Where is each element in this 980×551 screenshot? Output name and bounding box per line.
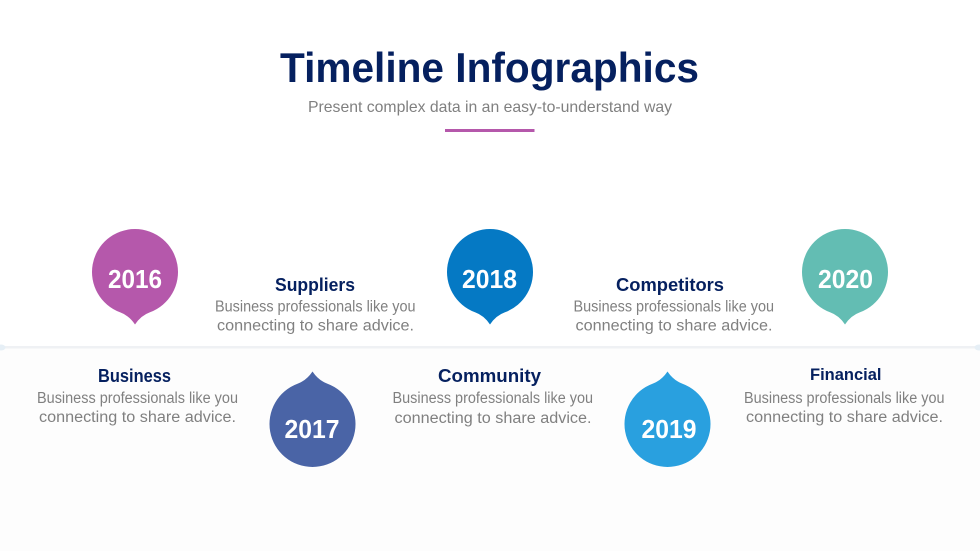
- year 2020: 2020: [818, 264, 873, 294]
- heading: Business: Business: [98, 365, 171, 386]
- text block: Financial: [744, 366, 944, 426]
- description: Community: Business professionals like you: [392, 390, 593, 407]
- pin 2016: [92, 229, 178, 324]
- heading: Competitors: Competitors: [616, 274, 724, 295]
- text block: Business: [37, 365, 238, 426]
- year 2019: 2019: [642, 414, 696, 444]
- description: Community: connecting to share advice.: [394, 410, 592, 427]
- description: Financial: [744, 390, 944, 426]
- milestone 2016: [92, 229, 178, 324]
- description: Business: Business professionals like you: [37, 390, 238, 407]
- description: Community: [392, 390, 593, 427]
- pin 2017: [269, 372, 356, 467]
- milestone 2019: [624, 372, 711, 467]
- year 2016: 2016: [108, 264, 162, 294]
- description: Suppliers: connecting to share advice.: [217, 318, 414, 334]
- description: Competitors: [574, 298, 774, 334]
- description: Business: [37, 390, 238, 426]
- year 2017: 2017: [284, 414, 340, 444]
- description: Suppliers: Business professionals like you: [215, 298, 416, 316]
- pin 2018: [447, 229, 533, 324]
- pin 2019: [624, 372, 711, 467]
- milestone 2017: [269, 372, 356, 467]
- description: Competitors: Business professionals like you: [574, 298, 774, 316]
- subtitle: Present complex data in an easy-to-understand way: [308, 99, 672, 116]
- description: Financial: Business professionals like you: [744, 390, 944, 407]
- milestone 2018: [447, 229, 533, 324]
- heading: Community: Community: [438, 365, 542, 386]
- text block: Suppliers: [215, 274, 416, 334]
- description: Financial: connecting to share advice.: [746, 409, 943, 426]
- text block: Community: [392, 365, 593, 427]
- heading: Suppliers: Suppliers: [275, 274, 355, 295]
- milestone 2020: [802, 229, 888, 324]
- year 2018: 2018: [462, 264, 517, 294]
- title: Timeline Infographics: [280, 44, 699, 91]
- pin 2020: [802, 229, 888, 324]
- description: Suppliers: [215, 298, 416, 334]
- description: Business: connecting to share advice.: [39, 409, 236, 426]
- text block: Competitors: [574, 274, 774, 334]
- description: Competitors: connecting to share advice.: [576, 318, 772, 334]
- heading: Financial: Financial: [810, 366, 882, 384]
- title underline: [445, 129, 534, 132]
